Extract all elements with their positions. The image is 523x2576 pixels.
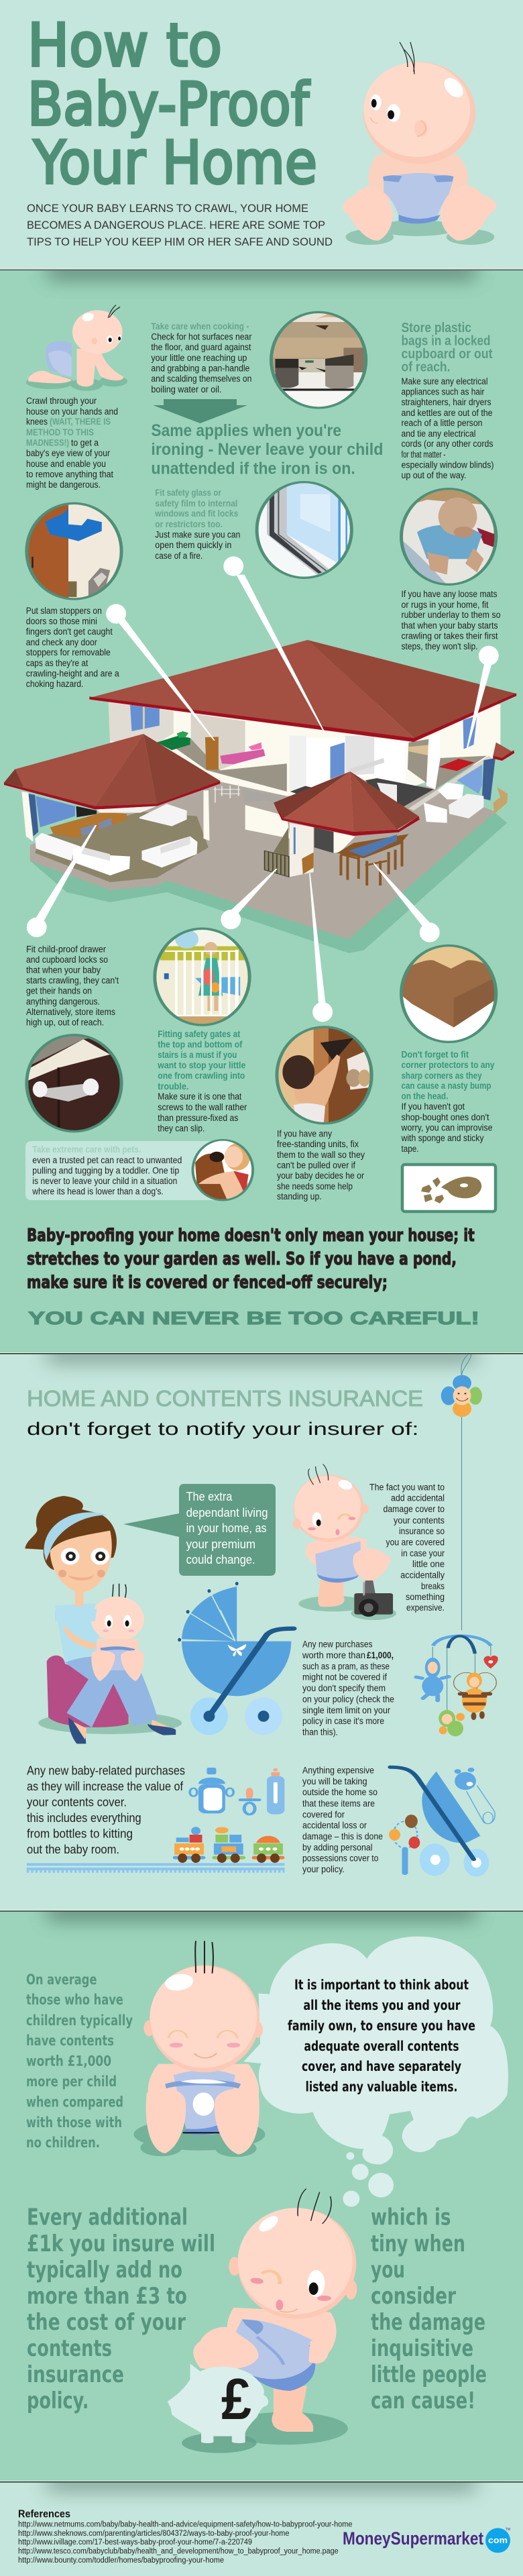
plastic bags tip: cords (or any other cords xyxy=(401,439,493,449)
free-standing units text: standing up. xyxy=(277,1191,322,1201)
illustration: mother and baby xyxy=(25,1496,182,1743)
accidental damage text: damage cover to xyxy=(384,1504,445,1514)
crawl tip text: to get a xyxy=(71,438,99,448)
garden warning: YOU CAN NEVER BE TOO CAREFUL! xyxy=(28,1308,479,1328)
crawl tip text: (WAIT, THERE IS xyxy=(50,417,111,427)
title xyxy=(27,11,317,197)
pram purchases text: £1,000, xyxy=(367,1650,394,1660)
intro text: BECOMES A DANGEROUS PLACE. HERE ARE SOME TOP xyxy=(27,219,325,231)
inquisitive people text: inquisitive xyxy=(371,2335,473,2362)
average contents text: On average xyxy=(26,1972,97,1988)
every additional 1k text: policy. xyxy=(27,2387,89,2414)
speech bubble xyxy=(123,1484,276,1576)
accidental damage text: add accidental xyxy=(391,1493,445,1503)
plastic bags tip: up out of the way. xyxy=(401,470,467,480)
callout: ironing: unattended if the iron is on. xyxy=(151,460,355,478)
average contents text: children typically xyxy=(26,2012,133,2029)
plastic bags tip: for that matter - xyxy=(401,449,445,460)
safety gates text: want to stop your little xyxy=(157,1061,246,1071)
free-standing units text: can't be pulled over if xyxy=(277,1161,355,1170)
accidental damage text: you are covered xyxy=(386,1538,445,1548)
slam stoppers text: crawling-height and are a xyxy=(26,669,119,679)
crawl tip text: baby's eye view of your xyxy=(26,448,110,458)
corner protectors text: can cause a nasty bump xyxy=(401,1081,491,1091)
thought bubble: family own, to ensure you have xyxy=(288,2018,475,2034)
average contents text: have contents xyxy=(26,2033,114,2049)
accidental damage text: in case your xyxy=(401,1548,445,1558)
references: http://www.netmums.com/baby/baby-health-and-advice/equipment-safety/how-to-babyproof-your-home xyxy=(18,2521,353,2529)
icon: crawling baby xyxy=(26,305,127,391)
window tip: or restrictors too. xyxy=(155,519,223,529)
corner protectors text: shop-bought ones don't xyxy=(401,1112,489,1122)
cooking tip: your little one reaching up xyxy=(151,353,247,363)
safety gates text: screws to the wall rather xyxy=(158,1102,247,1112)
safety gates text: Fitting safety gates at xyxy=(158,1029,241,1039)
illustration: pram xyxy=(178,1582,294,1735)
baby-related purchases text: Any new baby-related purchases xyxy=(27,1764,185,1778)
free-standing units text: them to the wall so they xyxy=(277,1150,365,1160)
expensive items text: that these items are xyxy=(302,1799,375,1809)
safety gates text: trouble. xyxy=(158,1081,188,1091)
loose mats text: If you have any loose mats xyxy=(401,589,498,599)
every additional 1k text: £1k you insure will xyxy=(27,2231,215,2257)
drawer locks text: Fit child-proof drawer xyxy=(26,944,106,954)
photo: corner protector kit xyxy=(402,1165,496,1212)
plastic bags tip: and tie any electrical xyxy=(401,429,476,439)
plastic bags tip: appliances such as hair xyxy=(401,387,485,397)
corner protectors text: tape. xyxy=(401,1144,418,1154)
thought bubble: adequate overall contents xyxy=(304,2038,459,2054)
pram purchases text: Any new purchases xyxy=(302,1640,373,1650)
window tip xyxy=(154,488,240,561)
inquisitive people text: which is xyxy=(371,2204,451,2231)
cooking tip: Take care when cooking - xyxy=(151,321,249,331)
crawl tip text: METHOD TO THIS xyxy=(26,427,94,437)
references: http://www.ivillage.com/17-best-ways-baby-proof-your-home/7-a-220749 xyxy=(18,2538,252,2546)
speech bubble: The extra xyxy=(186,1490,233,1503)
crawl tip text: house and enable you xyxy=(26,459,106,469)
pets tip panel: is never to leave your child in a situation xyxy=(32,1176,177,1186)
crawl tip text: house on your hands and xyxy=(26,407,118,417)
title: Your Home xyxy=(33,128,317,197)
pets tip panel: Take extreme care with pets. xyxy=(32,1144,141,1155)
drawer locks text: get their hands on xyxy=(26,986,92,996)
crawl tip text xyxy=(26,396,118,490)
cooking tip: and scalding themselves on xyxy=(151,374,251,384)
every additional 1k text: the cost of your xyxy=(27,2309,186,2336)
photo: baby on rug xyxy=(400,488,497,585)
plastic bags tip: reach of a little person xyxy=(401,418,483,428)
illustration: baby and piggy bank xyxy=(168,2189,357,2453)
accidental damage text: something xyxy=(406,1592,445,1602)
logo: MoneySupermarket.com: TM xyxy=(506,2528,510,2532)
slam stoppers text xyxy=(26,606,119,689)
corner protectors text: corner protectors to any xyxy=(401,1060,495,1070)
loose mats text xyxy=(401,589,500,651)
icon: clown toy and string xyxy=(441,1354,482,1630)
corner protectors text xyxy=(401,1049,495,1154)
every additional 1k text: contents xyxy=(27,2335,112,2362)
references: References xyxy=(18,2509,70,2520)
expensive items text: outside the home so xyxy=(302,1787,377,1797)
garden warning: make sure it is covered or fenced-off securely; xyxy=(27,1273,388,1293)
slam stoppers text: choking hazard. xyxy=(26,679,83,689)
accidental damage text: breaks xyxy=(421,1581,445,1591)
pets tip panel xyxy=(25,1141,220,1200)
safety gates text: Make sure it is one that xyxy=(158,1091,242,1102)
pram purchases text: such as a pram, as these xyxy=(302,1662,390,1672)
slam stoppers text: caps as they're at xyxy=(26,658,89,668)
safety gates text: stairs is a must if you xyxy=(158,1050,237,1060)
references: http://www.tesco.com/babyclub/baby/health_and_development/how_to_babyproof_your_home.page xyxy=(18,2548,339,2556)
baby-related purchases text: from bottles to kitting xyxy=(27,1827,133,1841)
illustration: baby and piggy bank: £ xyxy=(221,2367,251,2432)
pets tip panel: where its head is lower than a dog's. xyxy=(32,1186,164,1196)
expensive items text: by adding personal xyxy=(302,1842,373,1852)
baby-related purchases text: your contents cover. xyxy=(27,1796,127,1809)
heading: home and contents insurance xyxy=(27,1386,423,1439)
accidental damage text: accidentally xyxy=(400,1570,445,1580)
average contents text xyxy=(26,1972,133,2151)
safety gates text: the top and bottom of xyxy=(158,1039,243,1049)
loose mats text: rubber underlay to them so xyxy=(401,610,500,620)
intro text: TIPS TO HELP YOU KEEP HIM OR HER SAFE AND SOUND xyxy=(27,235,333,248)
photo: door slam stopper xyxy=(27,503,122,599)
window tip: open them quickly in xyxy=(155,540,231,550)
references xyxy=(18,2509,353,2565)
inquisitive people text: you xyxy=(371,2257,405,2284)
thought bubble: It is important to think about xyxy=(294,1977,469,1993)
thought bubble: cover, and have separately xyxy=(302,2058,461,2074)
photo: free-standing unit xyxy=(277,1026,372,1125)
plastic bags tip xyxy=(401,321,493,480)
heading: home and contents insurance: don't forget to notify your insurer of: xyxy=(27,1419,419,1439)
accidental damage text xyxy=(369,1483,445,1613)
title: How to xyxy=(27,11,222,80)
illustration: sitting baby xyxy=(343,42,496,245)
plastic bags tip: of reach. xyxy=(401,360,451,375)
illustration: happy baby xyxy=(133,1941,266,2157)
callout: ironing xyxy=(151,421,383,478)
crawl tip xyxy=(26,305,127,490)
drawer locks text: starts crawling, they can't xyxy=(26,975,119,985)
window tip: safety film to internal xyxy=(155,498,237,508)
cooking tip: and grabbing a pan-handle xyxy=(151,364,249,374)
crawl tip text: MADNESS!) xyxy=(26,438,69,448)
plastic bags tip: cupboard or out xyxy=(401,347,493,362)
expensive items text: possessions cover to xyxy=(302,1854,378,1864)
pram purchases text: policy in case it's more xyxy=(302,1716,384,1726)
corner protectors text: sharp corners as they xyxy=(401,1071,482,1081)
every additional 1k text: insurance xyxy=(27,2361,124,2388)
every additional 1k text: Every additional xyxy=(27,2204,188,2231)
icon: toy train xyxy=(27,1827,284,1872)
baby-related purchases text: out the baby room. xyxy=(27,1843,119,1856)
accidental damage text: insurance so xyxy=(399,1526,445,1536)
cooking tip: Check for hot surfaces near xyxy=(151,332,252,342)
average contents text: when compared xyxy=(26,2094,123,2110)
plastic bags tip: especially window blinds) xyxy=(401,460,493,470)
window tip: windows and fit locks xyxy=(154,508,238,519)
pram purchases text: single item limit on your xyxy=(302,1705,390,1715)
illustration: cutaway house xyxy=(4,640,516,953)
average contents text: with those with xyxy=(26,2114,122,2131)
icon: baby mobile xyxy=(416,1635,498,1736)
plastic bags tip: Make sure any electrical xyxy=(401,376,488,386)
thought bubble xyxy=(243,1937,508,2207)
accidental damage text: expensive. xyxy=(406,1603,445,1613)
free-standing units text xyxy=(277,1129,365,1201)
expensive items text: Anything expensive xyxy=(302,1766,374,1776)
corner protectors text: with sponge and sticky xyxy=(401,1133,484,1143)
crawl tip text: to remove anything that xyxy=(26,470,113,480)
references: http://www.bounty.com/toddler/homes/babyproofing-your-home xyxy=(18,2557,224,2565)
pram purchases text: you don't specify them xyxy=(302,1683,386,1693)
thought bubble: all the items you and your xyxy=(303,1997,461,2013)
slam stoppers text: fingers don't get caught xyxy=(26,627,113,637)
thought bubble: listed any valuable items. xyxy=(306,2079,457,2095)
photo: safety gate xyxy=(154,927,251,1028)
title: Baby-Proof xyxy=(27,70,310,139)
pets tip panel: even a trusted pet can react to unwanted xyxy=(32,1155,182,1165)
corner protectors text: worry, you can improvise xyxy=(401,1123,492,1133)
pram purchases text xyxy=(302,1640,394,1737)
intro text xyxy=(27,202,333,248)
average contents text: more per child xyxy=(26,2074,117,2090)
icon: stroller, rattle and bear pin xyxy=(389,1767,495,1876)
loose mats text: crawling or takes their first xyxy=(401,631,498,641)
every additional 1k text: typically add no xyxy=(27,2257,182,2284)
pram purchases text: might not be covered if xyxy=(302,1672,387,1682)
slam stoppers text: Put slam stoppers on xyxy=(26,606,102,616)
expensive items text: accidental loss or xyxy=(302,1821,367,1831)
baby-related purchases text xyxy=(27,1764,185,1856)
slam stoppers text: doors so those mini xyxy=(26,616,97,627)
speech bubble: your premium xyxy=(186,1538,255,1551)
photo: window xyxy=(257,482,352,578)
photo: corner protector xyxy=(400,945,497,1043)
speech bubble: could change. xyxy=(186,1553,255,1566)
callout: ironing: ironing - Never leave your child xyxy=(151,440,383,459)
logo: MoneySupermarket.com: com xyxy=(488,2535,508,2545)
slam stoppers text: and check any door xyxy=(26,637,97,647)
loose mats text: that when your baby starts xyxy=(401,621,498,631)
inquisitive people text: the damage xyxy=(371,2309,485,2336)
pets tip panel: pulling and tugging by a toddler. One tip xyxy=(32,1166,179,1175)
inquisitive people text: consider xyxy=(371,2283,457,2310)
connector lines and dots xyxy=(27,556,499,1022)
accidental damage text: your contents xyxy=(394,1515,445,1525)
window tip: case of a fire. xyxy=(155,551,202,561)
plastic bags tip: Store plastic xyxy=(401,321,471,335)
crawl tip text: might be dangerous. xyxy=(26,480,101,490)
expensive items text: damage – this is done xyxy=(302,1831,383,1841)
safety gates text: than pressure-fixed as xyxy=(158,1113,239,1123)
baby-related purchases text: as they will increase the value of xyxy=(27,1780,184,1793)
speech bubble: in your home, as xyxy=(186,1521,267,1535)
expensive items text: covered for xyxy=(302,1809,345,1819)
photo: child and dog xyxy=(193,1139,253,1200)
drawer locks text xyxy=(26,944,119,1027)
corner protectors text: Don't forget to fit xyxy=(401,1049,469,1060)
free-standing units text: your baby decides he or xyxy=(277,1171,364,1181)
loose mats text: steps, they won't slip. xyxy=(401,641,477,651)
safety gates text xyxy=(157,1029,247,1133)
expensive items text xyxy=(302,1766,383,1874)
drawer locks text: and cupboard locks so xyxy=(26,955,108,965)
free-standing units text: she needs some help xyxy=(277,1181,353,1191)
speech bubble: dependant living xyxy=(186,1506,268,1519)
window tip: Fit safety glass or xyxy=(155,488,221,498)
window tip: Just make sure you can xyxy=(155,530,240,540)
expensive items text: your policy. xyxy=(302,1864,345,1874)
photo: drawer lock xyxy=(27,1034,122,1132)
plastic bags tip: bags in a locked xyxy=(401,334,491,349)
plastic bags tip: and kettles are out of the xyxy=(401,408,492,418)
cooking tip: boiling water or oil. xyxy=(151,384,221,394)
pram purchases text: than this). xyxy=(302,1727,338,1737)
icon: bottles and dummy xyxy=(190,1768,284,1815)
slam stoppers text: stoppers for removable xyxy=(26,647,111,657)
pram purchases text: worth more than xyxy=(302,1650,365,1660)
photo: stove xyxy=(270,311,367,409)
average contents text: worth £1,000 xyxy=(26,2053,111,2069)
cooking tip xyxy=(151,321,252,394)
drawer locks text: high up, out of reach. xyxy=(26,1017,104,1027)
garden warning xyxy=(27,1226,479,1328)
crawl tip text: Crawl through your xyxy=(26,396,97,406)
accidental damage text: little one xyxy=(412,1559,445,1569)
references: http://www.sheknows.com/parenting/articles/804372/ways-to-baby-proof-your-home xyxy=(18,2530,290,2538)
safety gates text: they can slip. xyxy=(158,1123,205,1133)
drawer locks text: Alternatively, store items xyxy=(26,1007,115,1017)
drawer locks text: anything dangerous. xyxy=(26,997,100,1006)
plastic bags tip: straighteners, hair dryers xyxy=(401,397,491,407)
arrow: down xyxy=(153,399,247,423)
free-standing units text: If you have any xyxy=(277,1129,332,1139)
accidental damage text: The fact you want to xyxy=(369,1483,445,1493)
cooking tip: the floor, and guard against xyxy=(151,342,251,352)
crawl tip text: knees xyxy=(26,417,48,427)
inquisitive people text xyxy=(371,2204,487,2414)
callout: ironing: Same applies when you're xyxy=(151,421,341,440)
intro text: ONCE YOUR BABY LEARNS TO CRAWL, YOUR HOME xyxy=(27,202,308,215)
inquisitive people text: little people xyxy=(371,2361,487,2388)
safety gates text: one from crawling into xyxy=(158,1071,245,1081)
pram purchases text: on your policy (check the xyxy=(302,1695,394,1705)
logo: MoneySupermarket.com: MoneySupermarket xyxy=(343,2528,483,2548)
inquisitive people text: can cause! xyxy=(371,2387,475,2414)
corner protectors text: If you haven't got xyxy=(401,1102,465,1112)
heading: home and contents insurance: HOME AND CONTENTS INSURANCE xyxy=(27,1386,423,1411)
every additional 1k text xyxy=(27,2204,215,2414)
expensive items text: you will be taking xyxy=(302,1776,367,1786)
average contents text: those who have xyxy=(26,1992,123,2008)
corner protectors text: on the head. xyxy=(401,1091,448,1102)
illustration: baby with camera xyxy=(293,1464,396,1620)
loose mats text: or rugs in your home, fit xyxy=(401,600,489,610)
baby-related purchases text: this includes everything xyxy=(27,1811,141,1825)
drawer locks text: that when your baby xyxy=(26,965,101,975)
inquisitive people text: tiny when xyxy=(371,2231,465,2257)
average contents text: no children. xyxy=(26,2135,100,2151)
every additional 1k text: more than £3 to xyxy=(27,2283,187,2310)
free-standing units text: free-standing units, fix xyxy=(277,1139,359,1149)
